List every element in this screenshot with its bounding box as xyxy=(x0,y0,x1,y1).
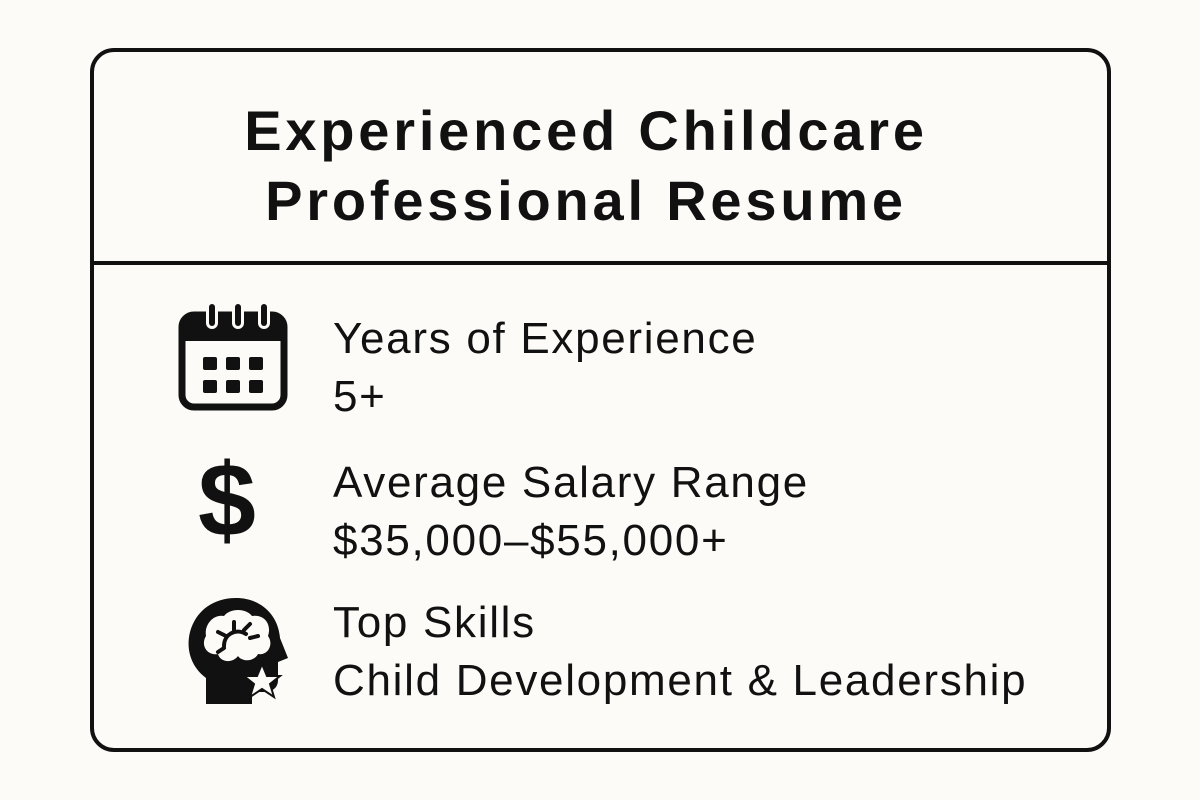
icon: calendar xyxy=(178,304,288,410)
icon: dollar: $ xyxy=(198,443,256,559)
text: experience xyxy=(333,314,757,421)
title: Experienced Childcare xyxy=(244,99,928,162)
title: Professional Resume xyxy=(265,169,907,232)
text: skills: Child Development & Leadership xyxy=(333,656,1027,705)
icon: head with brain and star xyxy=(188,598,288,704)
text: experience: Years of Experience xyxy=(333,314,757,363)
card frame xyxy=(90,48,1111,752)
text: skills: Top Skills xyxy=(333,598,536,647)
text: salary xyxy=(333,458,809,565)
text: experience: 5+ xyxy=(333,372,387,421)
title xyxy=(244,99,928,232)
text: skills xyxy=(333,598,1027,705)
text: salary: $35,000–$55,000+ xyxy=(333,516,728,565)
text: salary: Average Salary Range xyxy=(333,458,809,507)
